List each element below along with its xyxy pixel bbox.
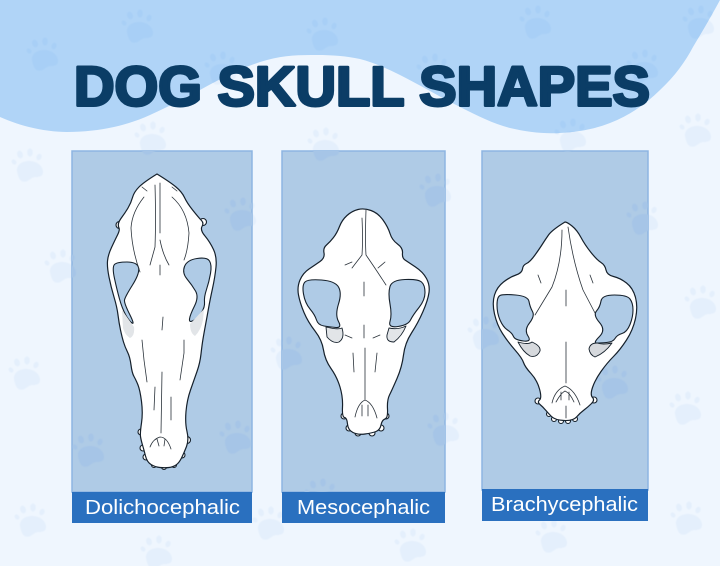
left eye socket: [497, 295, 533, 341]
right condyle: [387, 326, 406, 342]
skull: dolichocephalic: [107, 174, 216, 470]
title: DOG SKULL SHAPES: [74, 54, 650, 118]
label: Dolichocephalic: Dolichocephalic: [85, 496, 240, 519]
left condyle: [518, 342, 540, 356]
panel: dolichocephalic background: [72, 151, 252, 492]
snout bumps: [341, 413, 389, 436]
skull: brachycephalic: [493, 222, 637, 424]
skull outline: [298, 209, 429, 434]
panel paw prints: [72, 151, 648, 492]
right eye socket: [389, 279, 425, 327]
label: Mesocephalic: Mesocephalic: [297, 496, 430, 519]
label: Mesocephalic: [282, 492, 445, 523]
left eye socket: [303, 280, 340, 328]
label: Brachycephalic: [482, 489, 648, 521]
label: Brachycephalic: Brachycephalic: [491, 493, 638, 516]
skull outline: [493, 222, 637, 421]
left eye socket: [113, 262, 139, 323]
panel: brachycephalic background: [482, 151, 648, 490]
right eye socket: [595, 295, 633, 343]
banner paw prints: [213, 14, 712, 134]
skull: mesocephalic: [298, 209, 429, 436]
snout bumps: [535, 397, 597, 424]
snout and ear bumps: [116, 218, 206, 470]
top wave banner: [0, 0, 720, 133]
right condyle: [589, 343, 612, 357]
shading: [122, 309, 204, 338]
right eye socket: [184, 258, 211, 321]
label: Dolichocephalic: [72, 492, 252, 523]
bone detail lines: [131, 183, 189, 449]
bone detail lines: [345, 210, 386, 418]
skull outline: [107, 174, 216, 468]
bone detail lines: [535, 227, 595, 418]
panel: mesocephalic background: [282, 151, 445, 492]
left condyle: [326, 327, 343, 342]
